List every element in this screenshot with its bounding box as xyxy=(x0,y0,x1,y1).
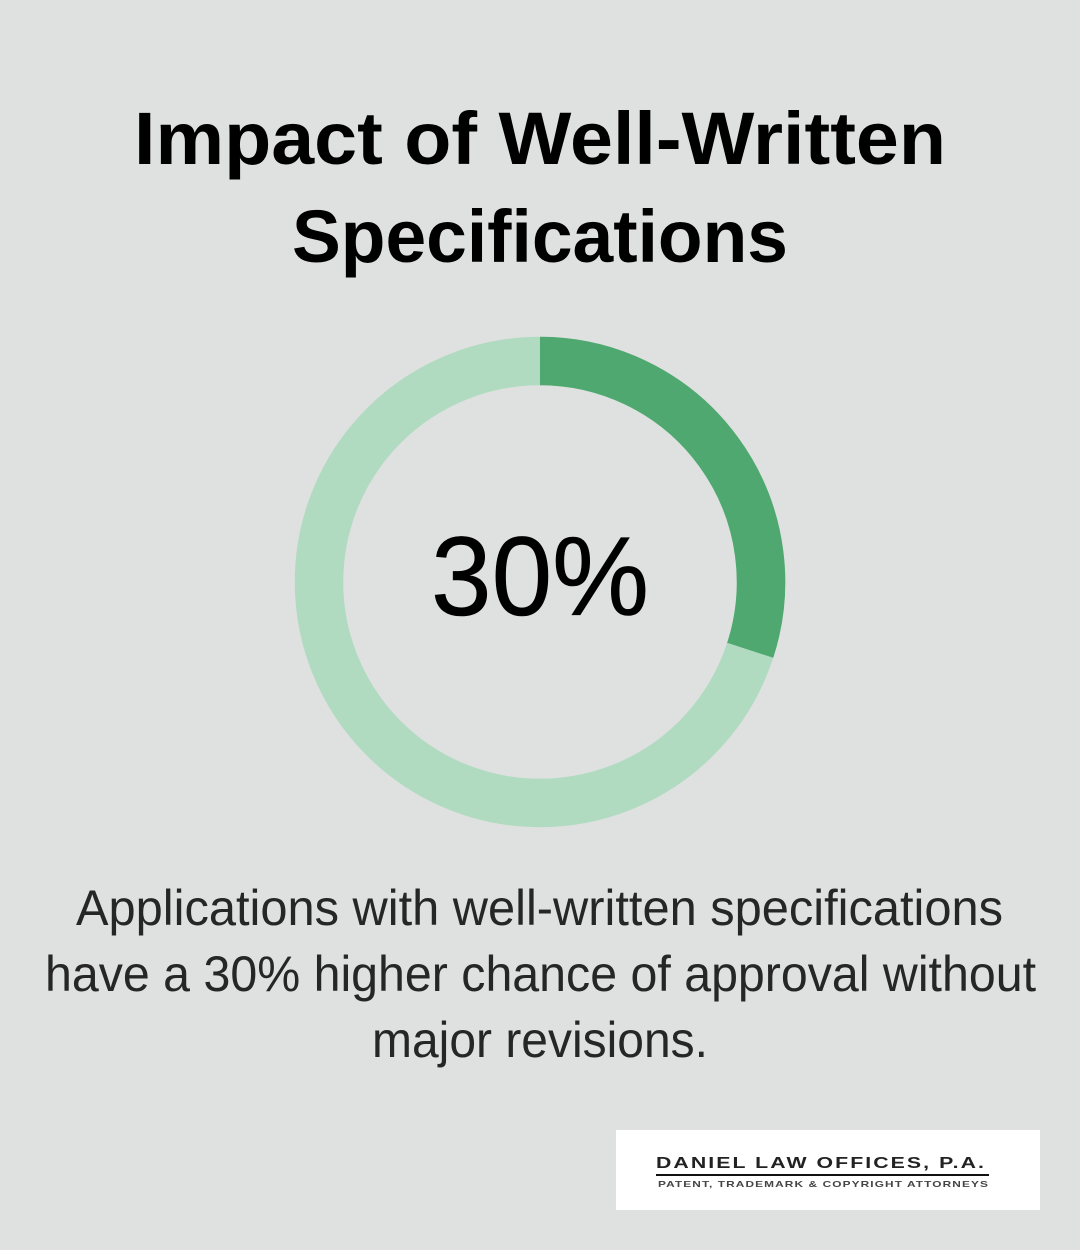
description text: major revisions. xyxy=(372,1012,708,1068)
description text: Applications with well-written specifications xyxy=(76,880,1003,936)
logo: Daniel Law Offices: DANIEL LAW OFFICES, P.A. xyxy=(656,1155,986,1172)
donut chart: 30% xyxy=(319,361,761,803)
center value: 30% xyxy=(431,514,649,639)
logo: Daniel Law Offices xyxy=(616,1130,1040,1210)
description text xyxy=(45,880,1036,1068)
title: Specifications xyxy=(292,195,788,278)
logo: Daniel Law Offices: PATENT, TRADEMARK & COPYRIGHT ATTORNEYS xyxy=(658,1179,989,1189)
chart track xyxy=(319,361,761,803)
chart value arc xyxy=(540,361,761,650)
title: Impact of Well-Written xyxy=(134,97,946,180)
description text: have a 30% higher chance of approval without xyxy=(45,946,1036,1002)
title xyxy=(134,97,946,278)
